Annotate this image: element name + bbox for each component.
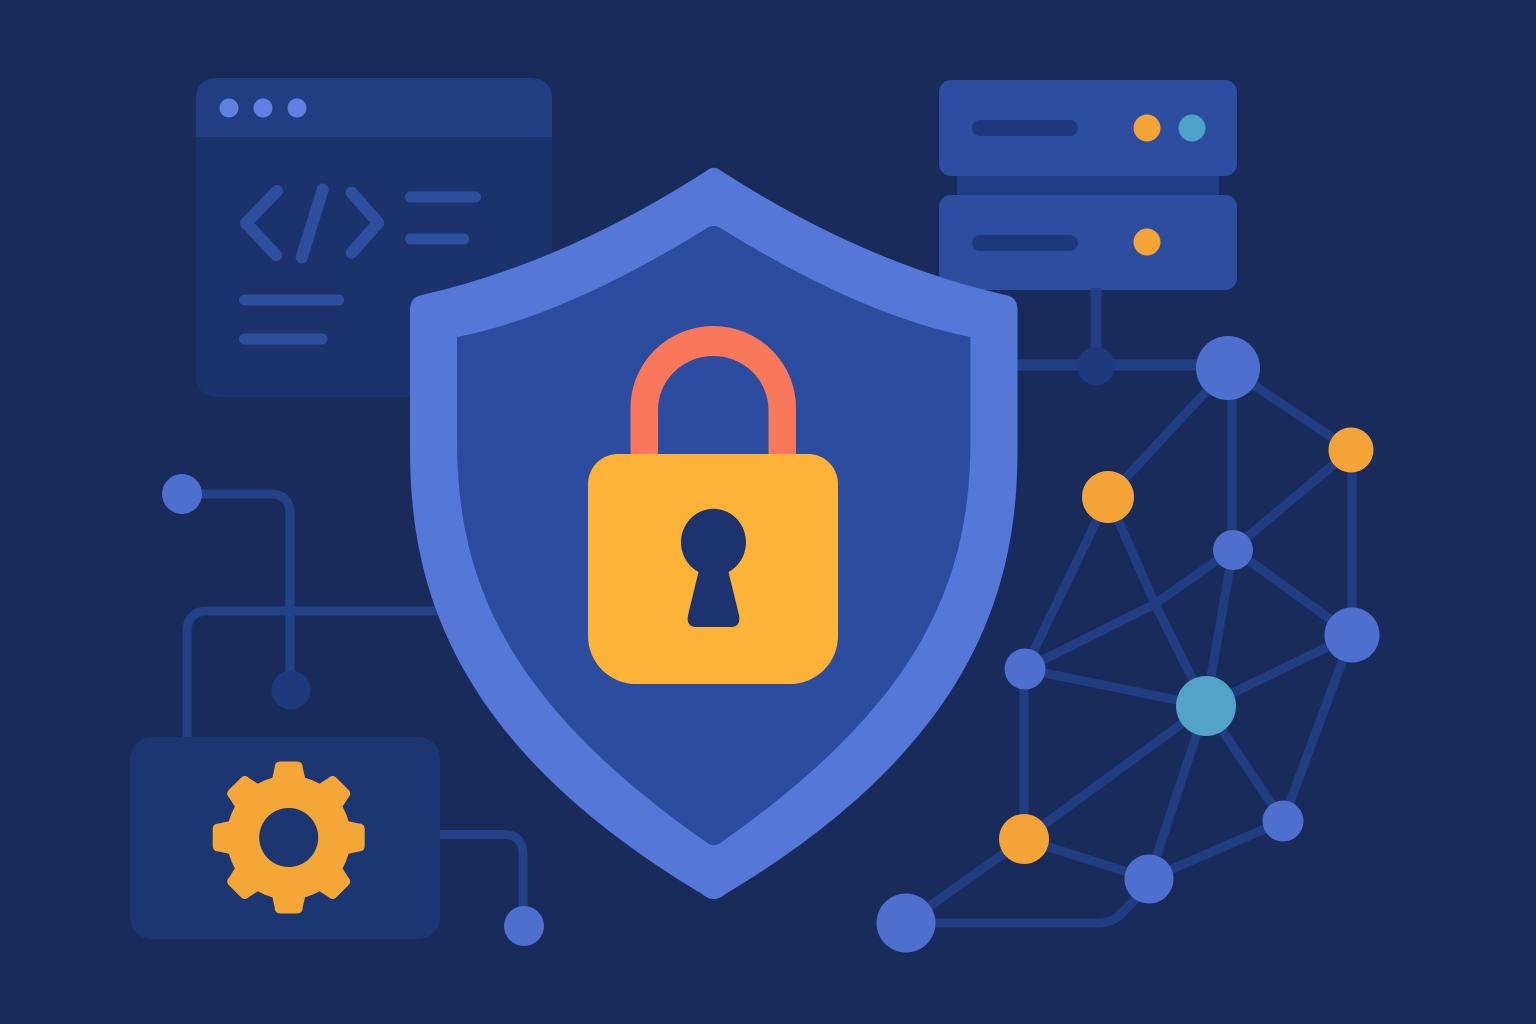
icon: circuit node top left (162, 474, 202, 514)
panel: code window (196, 78, 552, 397)
network nodes (876, 336, 1380, 952)
icon: circuit node bottom (504, 906, 544, 946)
network links (906, 368, 1352, 923)
panel: settings box (130, 737, 440, 939)
icon: shield (410, 168, 1018, 899)
icon: gear (213, 762, 365, 914)
icon: circuit junction (272, 670, 310, 710)
network connector from server (1010, 288, 1228, 385)
lock body (588, 454, 838, 684)
circuit lines left (182, 494, 523, 925)
lock shackle (630, 326, 796, 456)
keyhole (681, 509, 746, 627)
panel: server rack (939, 80, 1237, 290)
icon: padlock (588, 326, 838, 684)
